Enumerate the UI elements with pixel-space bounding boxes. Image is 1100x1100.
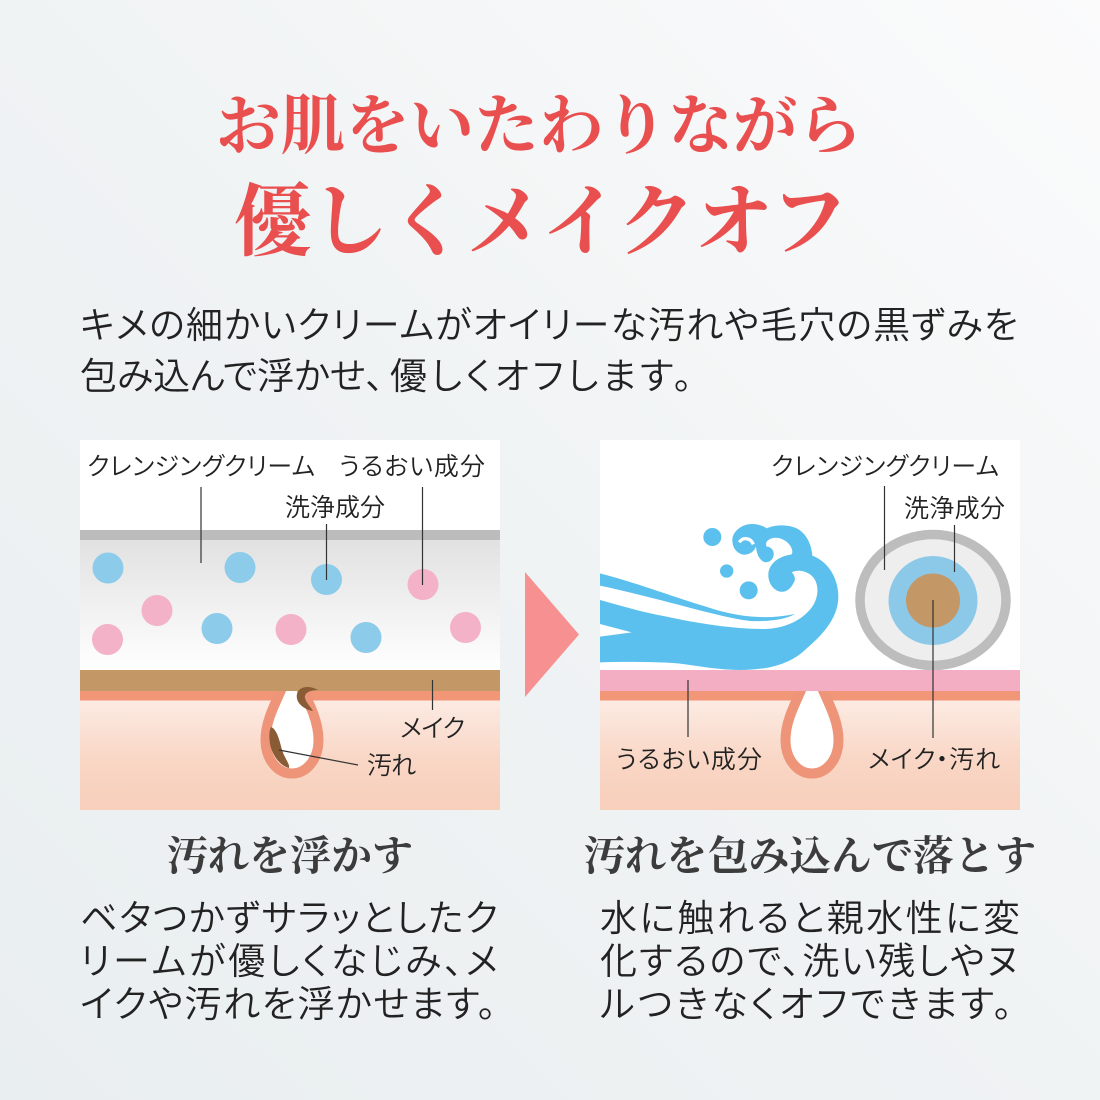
labels: クレンジングクリーム <box>771 453 999 481</box>
crest curl cut <box>739 539 753 544</box>
upper strand <box>600 573 795 621</box>
labels: クレンジングクリーム <box>87 453 315 481</box>
intro text <box>80 305 1018 397</box>
text: right column: ルつきなくオフできます。 <box>600 984 1012 1025</box>
labels: メイク <box>400 715 465 743</box>
text: left column: ベタつかずサラッとしたク <box>80 898 498 939</box>
pore <box>266 688 318 774</box>
labels: 洗浄成分 <box>285 494 385 522</box>
labels: うるおい成分 <box>339 453 485 481</box>
intro text: 包み込んで浮かせ、 <box>80 356 384 397</box>
pore <box>786 688 838 774</box>
title: お肌をいたわりながら <box>216 91 862 163</box>
cleansing cream ball <box>860 534 1006 666</box>
panel: before <box>80 440 500 810</box>
text: right column <box>600 898 1020 1025</box>
text: left column: イクや汚れを浮かせます。 <box>80 984 496 1025</box>
panel: after <box>600 440 1020 810</box>
intro text: 優しくオフします。 <box>390 356 692 397</box>
labels: メイク・汚れ <box>868 746 1000 774</box>
labels <box>87 453 485 780</box>
text: left column: リームが優しくなじみ、メ <box>80 941 498 982</box>
title <box>216 91 862 267</box>
labels: 洗浄成分 <box>904 495 1005 523</box>
labels <box>616 453 1005 774</box>
wave <box>600 524 838 670</box>
heading: left column: 汚れを浮かす <box>167 833 413 879</box>
title: 優しくメイクオフ <box>234 180 848 267</box>
leader lines <box>201 487 432 765</box>
labels: うるおい成分 <box>616 746 762 774</box>
intro text: キメの細かいクリームがオイリーな汚れや毛穴の黒ずみを <box>80 305 1018 346</box>
skin layers <box>600 700 1020 810</box>
labels: 汚れ <box>367 752 416 780</box>
main body and crest <box>600 524 838 670</box>
leader lines <box>688 486 954 738</box>
ingredient dots <box>92 552 481 655</box>
skin layers <box>80 700 500 810</box>
dirt <box>297 687 318 711</box>
arrow <box>525 572 579 697</box>
text: right column: 化するので、洗い残しやヌ <box>600 941 1018 982</box>
text: right column: 水に触れると親水性に変 <box>600 898 1020 939</box>
text: left column <box>80 898 498 1025</box>
cream layer <box>80 530 500 670</box>
heading: right column: 汚れを包み込んで落とす <box>584 833 1036 879</box>
